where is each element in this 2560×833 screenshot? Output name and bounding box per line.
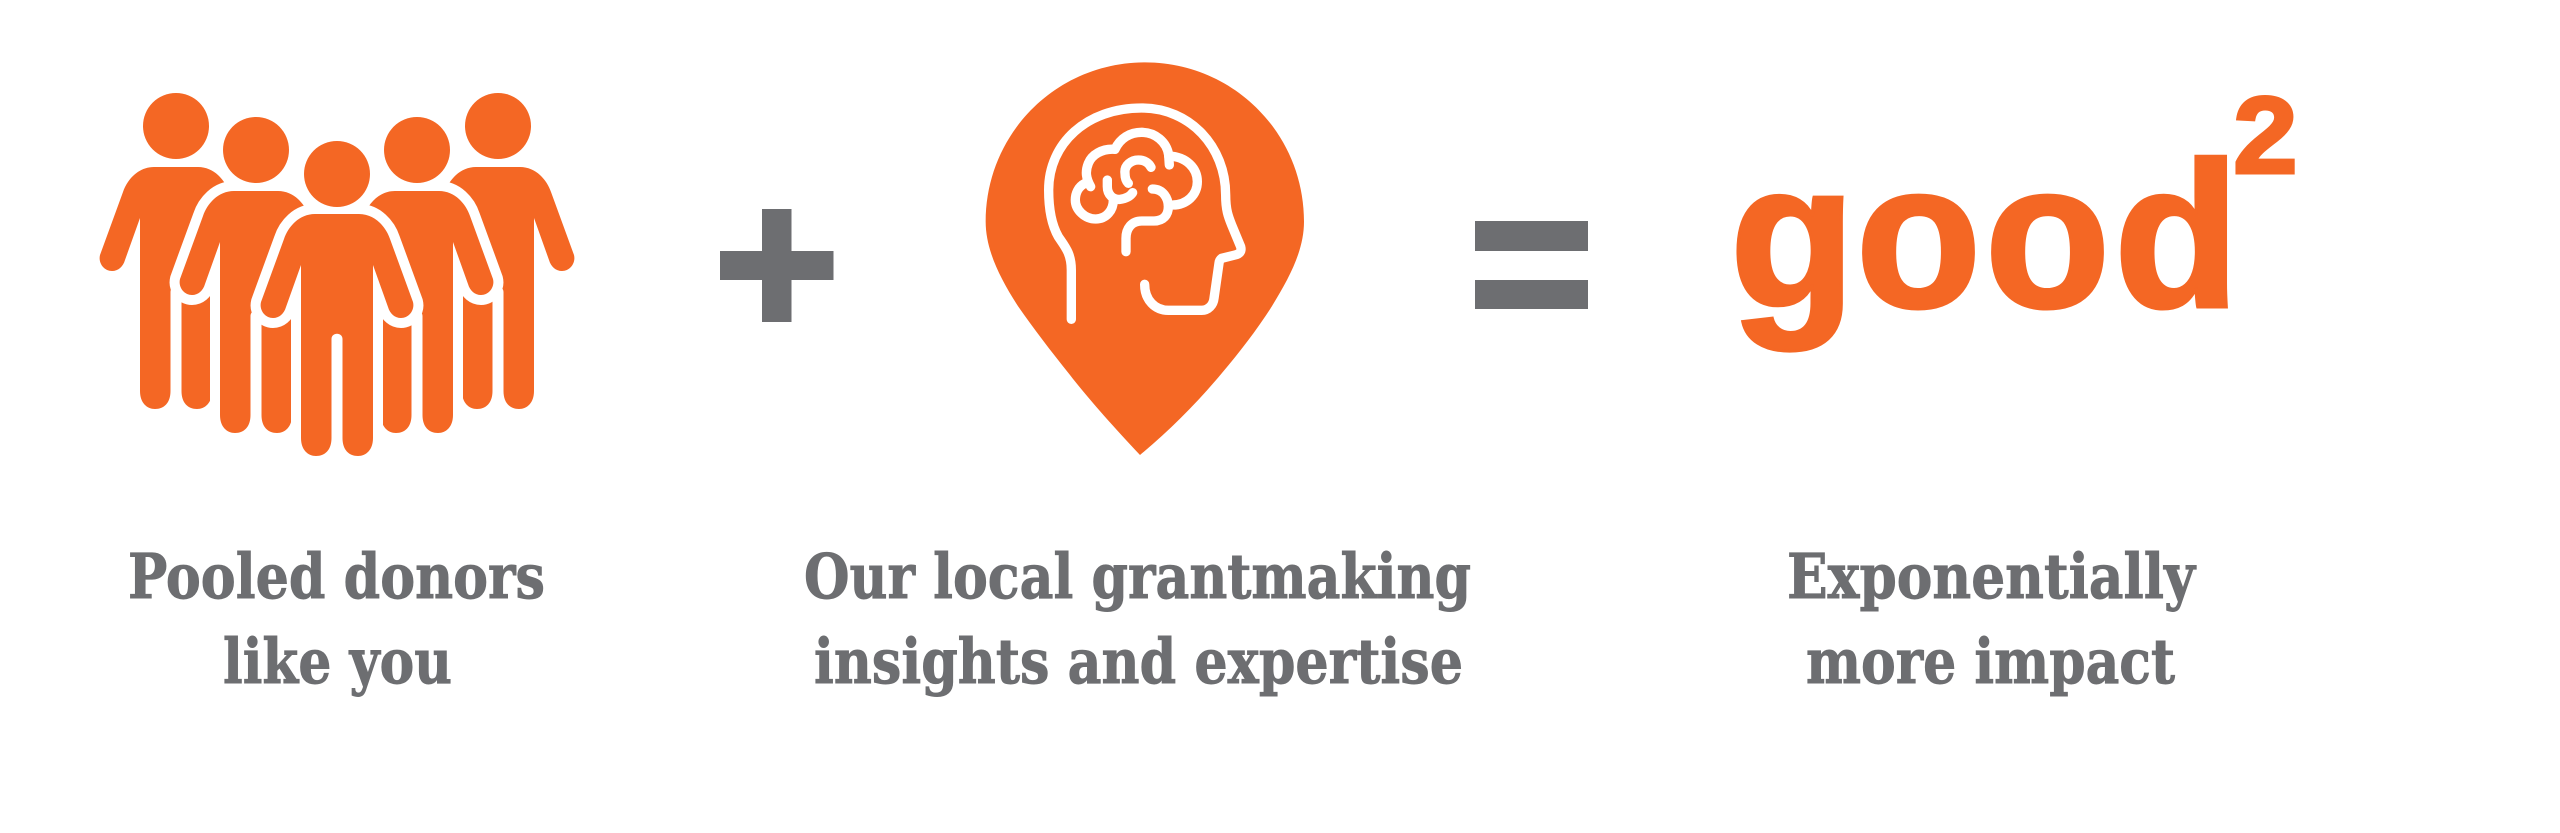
icon: group of donors <box>100 93 574 456</box>
caption: local grantmaking: insights and expertise <box>814 625 1463 698</box>
logo: good squared: good <box>1725 135 2241 370</box>
icon: plus sign <box>720 209 834 322</box>
caption: exponential impact <box>1787 540 2197 698</box>
caption: pooled donors <box>128 540 545 698</box>
caption: exponential impact: Exponentially <box>1787 540 2197 613</box>
caption: local grantmaking <box>804 540 1471 698</box>
person: inner left <box>180 117 332 433</box>
caption: exponential impact: more impact <box>1806 625 2175 698</box>
head and brain line art <box>1049 108 1241 319</box>
caption: pooled donors: Pooled donors <box>128 540 545 613</box>
caption: local grantmaking: Our local grantmaking <box>804 540 1471 613</box>
person: far right <box>422 93 574 409</box>
icon: equals sign <box>1475 221 1588 309</box>
caption: pooled donors: like you <box>223 625 452 698</box>
logo: good squared: 2 <box>2230 79 2300 208</box>
person: far left <box>100 93 252 409</box>
icon: location pin with head and brain <box>986 62 1304 455</box>
person: centre front <box>261 141 413 456</box>
person: inner right <box>341 117 493 433</box>
pin shape <box>986 62 1304 455</box>
